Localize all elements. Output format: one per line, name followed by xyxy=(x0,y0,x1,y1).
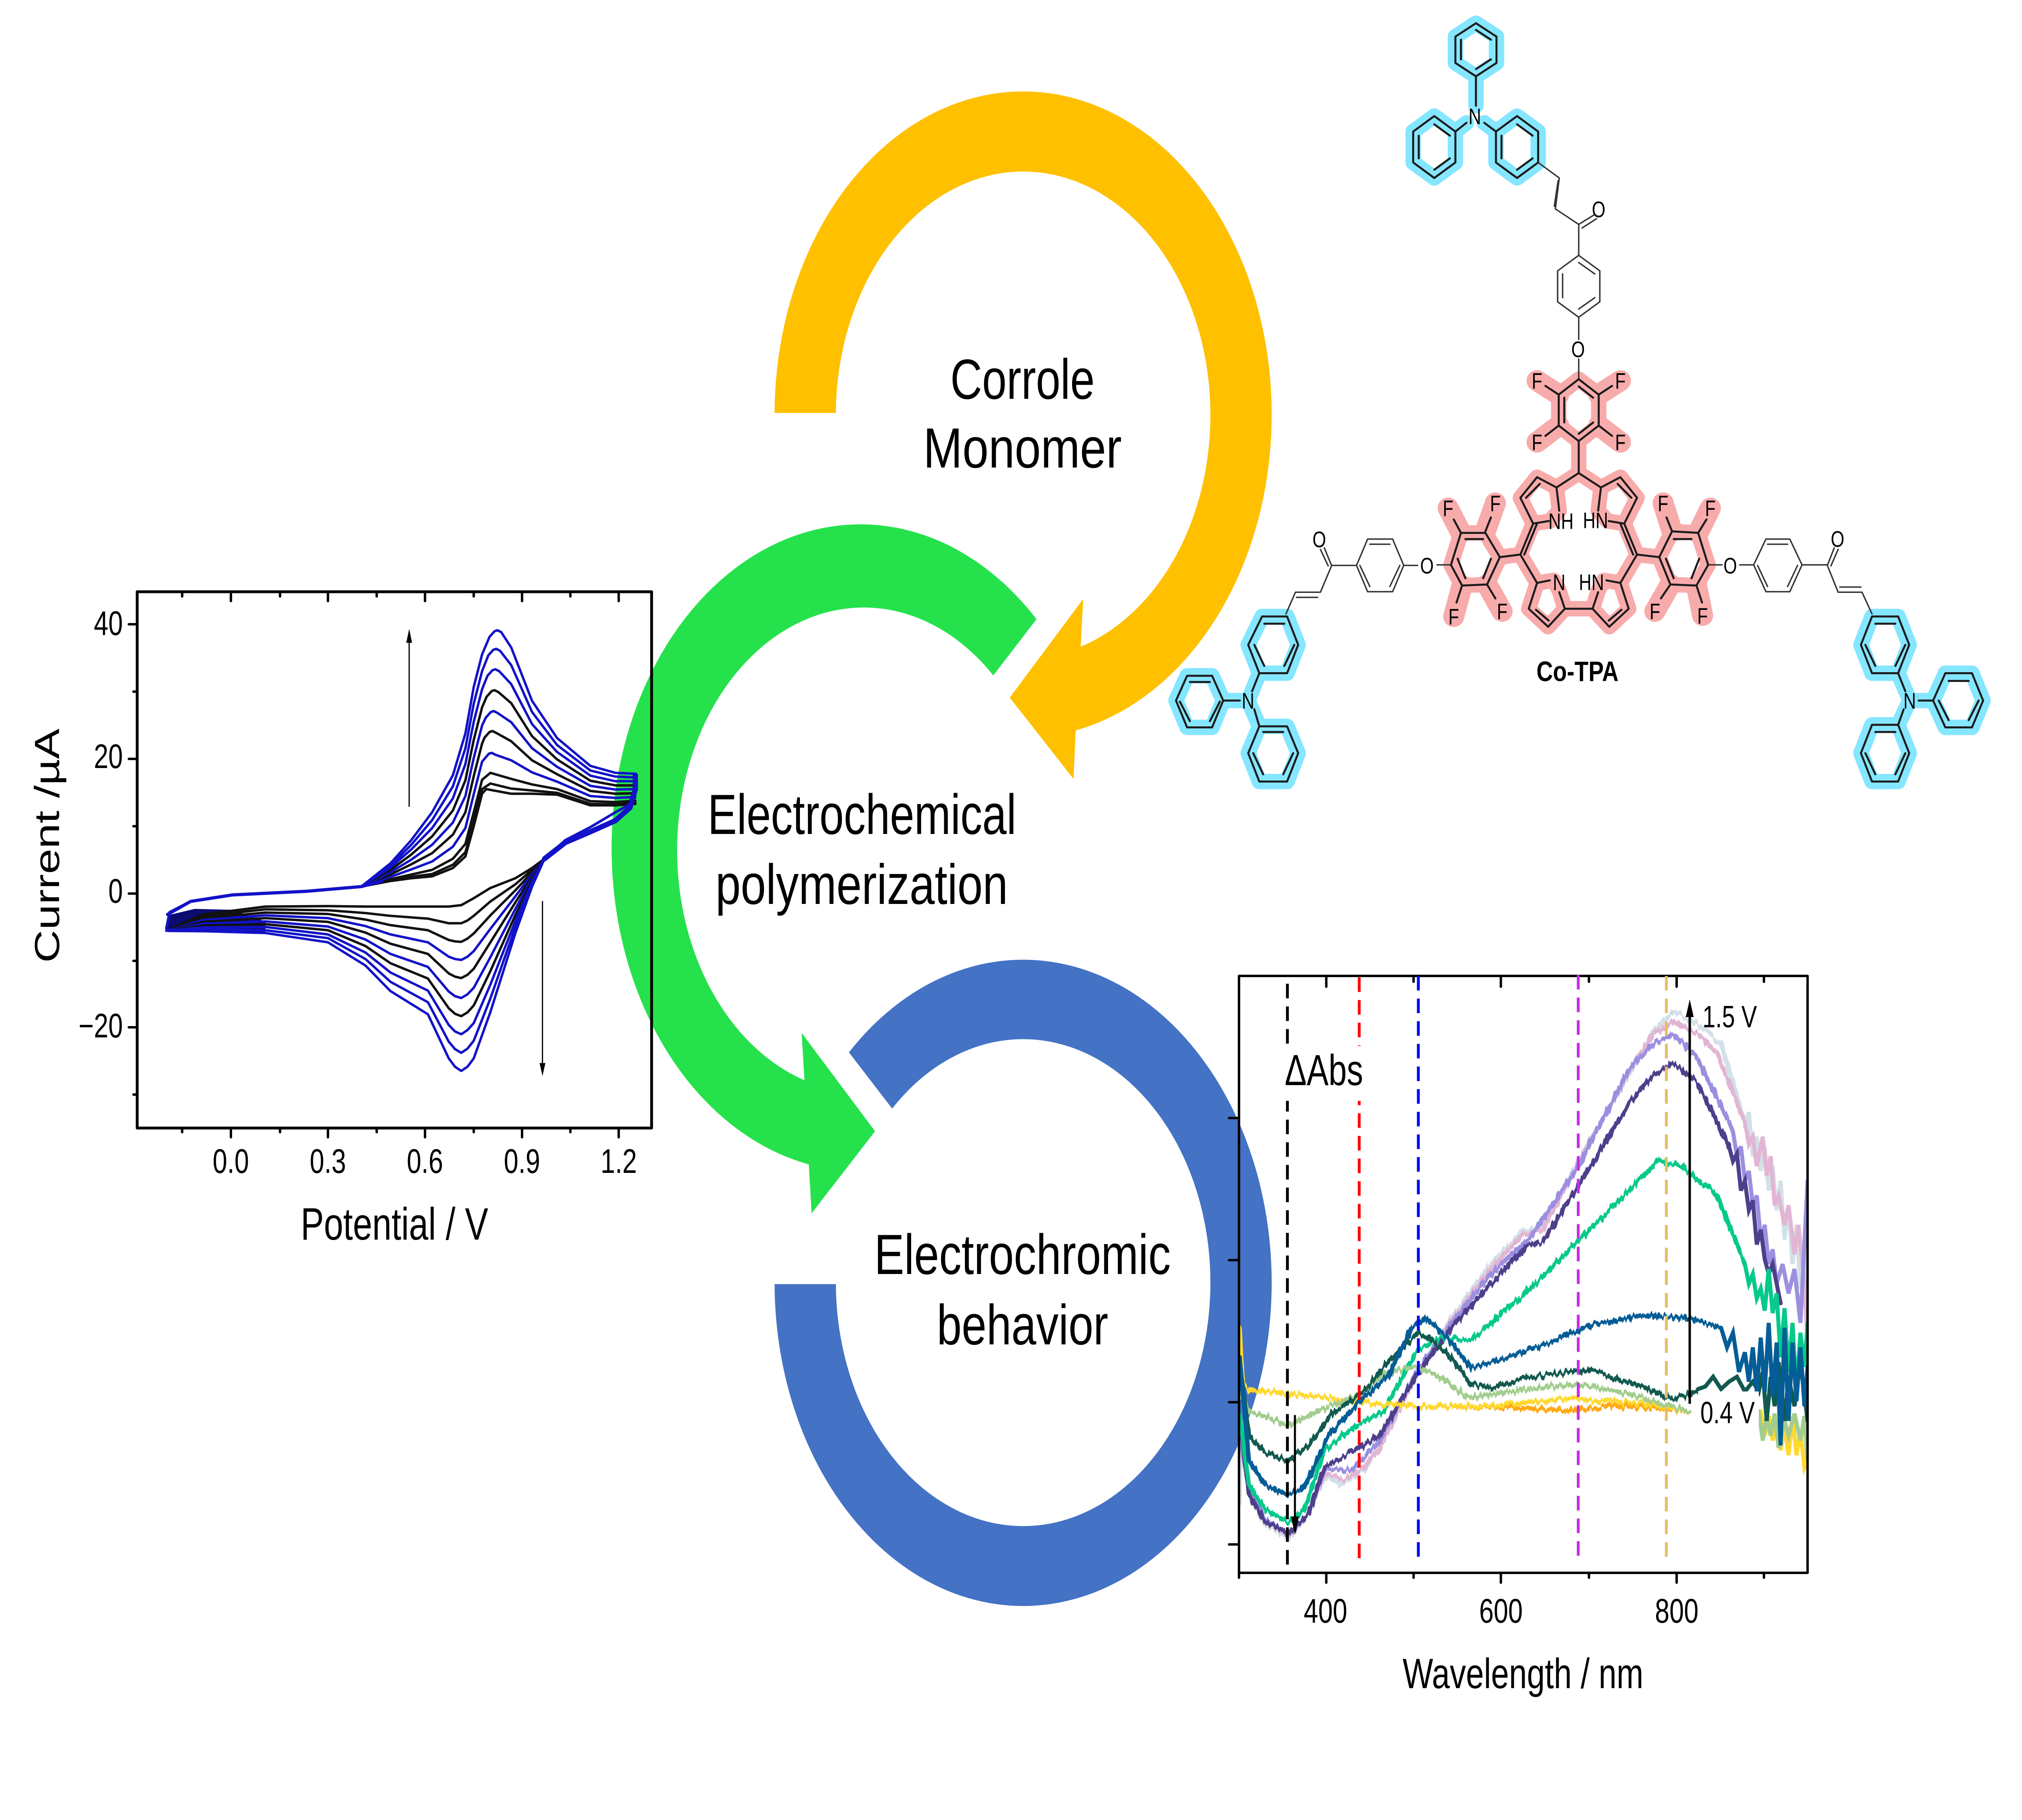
cv x tick labels: 0.9 xyxy=(504,1142,540,1180)
atom labels: F xyxy=(1532,430,1542,455)
cyan triphenylamine highlights xyxy=(1176,23,1983,781)
cv x tick labels xyxy=(213,1142,637,1180)
atom labels: N xyxy=(1904,688,1916,713)
arrow: blue circular arrow xyxy=(774,960,1272,1606)
atom labels: F xyxy=(1448,604,1459,629)
atom labels: HN xyxy=(1583,508,1608,533)
chart: absorbance difference spectra xyxy=(1229,975,1808,1697)
atom labels: O xyxy=(1831,527,1844,552)
atom labels: HN xyxy=(1579,570,1604,595)
spectra down arrow xyxy=(1291,1415,1299,1534)
chart: cyclic voltammogram xyxy=(28,592,651,1250)
black ring and core bonds xyxy=(1176,23,1983,781)
spectra up arrow xyxy=(1686,999,1694,1404)
atom labels: F xyxy=(1650,599,1660,624)
atom labels xyxy=(1242,104,1916,713)
heading: Corrole Monomer xyxy=(923,348,1122,480)
heading: Electrochemical polymerization xyxy=(708,783,1016,916)
arrow: green circular arrow xyxy=(611,524,1036,1213)
arrow: yellow circular arrow xyxy=(774,91,1272,779)
spectra x tick labels xyxy=(1304,1592,1698,1630)
grey linker bonds xyxy=(1286,163,1872,614)
compound name: Co-TPA xyxy=(1536,656,1618,688)
cv x tick labels: 0.3 xyxy=(310,1142,346,1180)
atom labels: N xyxy=(1468,104,1481,129)
spectra x tick labels: 600 xyxy=(1479,1592,1523,1630)
cv x tick labels: 0.0 xyxy=(213,1142,249,1180)
cv y tick labels: 0 xyxy=(108,872,123,910)
label: 1.5 V: 1.5 V xyxy=(1703,1000,1757,1034)
spectra plot in zoom coordinates xyxy=(1229,975,1808,1583)
cv y tick labels: 40 xyxy=(94,604,123,642)
cv x tick labels: 1.2 xyxy=(601,1142,637,1180)
white boxes behind labels xyxy=(1283,1046,1759,1433)
dashed marker lines xyxy=(1287,975,1666,1569)
pink corrole highlights xyxy=(1451,379,1708,627)
cv x axis title: Potential / V xyxy=(300,1199,489,1250)
atom labels: NH xyxy=(1548,509,1574,534)
heading: Electrochromic behavior: Electrochromic xyxy=(874,1223,1171,1286)
spectra frame and ticks xyxy=(1229,976,1808,1583)
atom labels: F xyxy=(1532,368,1542,394)
heading: Electrochromic behavior: behavior xyxy=(937,1293,1108,1357)
molecule drawing xyxy=(1176,23,1983,781)
atom labels: O xyxy=(1724,553,1737,578)
spectra curves xyxy=(1239,1012,1808,1539)
cv x tick labels: 0.6 xyxy=(407,1142,443,1180)
cv y tick labels: 20 xyxy=(94,737,123,775)
label: 0.4 V: 0.4 V xyxy=(1701,1396,1755,1430)
cv plot frame, ticks and curves xyxy=(129,592,651,1137)
atom labels: F xyxy=(1490,491,1501,516)
cv down arrow xyxy=(539,902,546,1076)
atom labels: O xyxy=(1313,527,1326,552)
atom labels: F xyxy=(1443,496,1453,521)
spectra x tick labels: 400 xyxy=(1304,1592,1347,1630)
heading: Electrochromic behavior xyxy=(874,1223,1171,1357)
atom labels: F xyxy=(1705,496,1715,521)
heading: Corrole Monomer: Monomer xyxy=(923,417,1122,480)
heading: Corrole Monomer: Corrole xyxy=(950,348,1095,411)
atom labels: N xyxy=(1553,570,1565,595)
atom labels: O xyxy=(1571,337,1585,362)
atom labels: O xyxy=(1420,553,1434,578)
atom labels: F xyxy=(1697,603,1708,629)
pink fluorine blobs xyxy=(1448,381,1710,616)
heading: Electrochemical polymerization: polymerization xyxy=(715,853,1008,916)
spectra x tick labels: 800 xyxy=(1655,1592,1698,1630)
label: delta Abs: ΔAbs xyxy=(1285,1046,1363,1095)
cv y tick labels xyxy=(78,604,123,1045)
cv up arrow xyxy=(406,629,412,806)
atom labels: F xyxy=(1497,599,1508,624)
heading: Electrochemical polymerization: Electrochemical xyxy=(708,783,1016,846)
atom labels: F xyxy=(1615,430,1626,455)
spectra x axis title: Wavelength / nm xyxy=(1402,1650,1643,1697)
atom labels: F xyxy=(1615,368,1626,394)
molecule: Co-TPA structure xyxy=(1176,23,1983,781)
atom labels: F xyxy=(1658,491,1668,516)
cv y axis title: Current /µA xyxy=(28,728,67,963)
cv y tick labels: −20 xyxy=(78,1007,123,1045)
atom labels: O xyxy=(1592,197,1605,222)
atom labels: N xyxy=(1242,688,1254,713)
